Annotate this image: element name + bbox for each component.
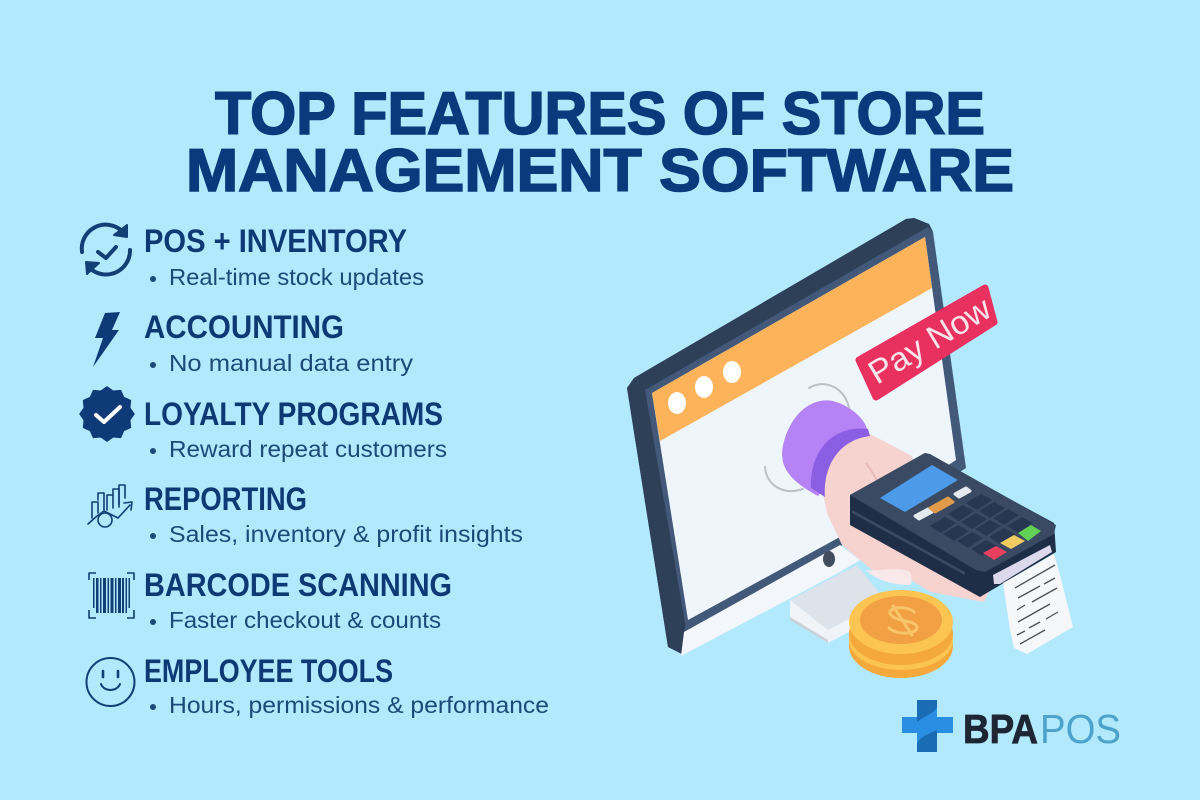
hand holding terminal [820, 433, 990, 602]
feature: POS + inventory [82, 223, 424, 290]
icon: sync with check [82, 225, 130, 275]
monitor body [627, 218, 966, 656]
terminal screen [880, 465, 958, 512]
icon: lightning bolt [93, 312, 120, 367]
heading: REPORTING [144, 481, 307, 517]
logo: BPA POS [902, 700, 1121, 752]
title: TOP FEATURES OF STORE [215, 80, 985, 147]
icon: verified badge [80, 387, 134, 441]
feature: barcode scanning [89, 567, 452, 633]
heading: EMPLOYEE TOOLS [144, 653, 393, 689]
heading: POS + INVENTORY [144, 223, 407, 259]
feature: accounting [93, 309, 414, 376]
sleeve cuff [782, 400, 870, 497]
motion arcs [765, 384, 849, 491]
illustration: POS payment on monitor [627, 218, 1073, 678]
heading: ACCOUNTING [144, 309, 344, 345]
icon: barcode [89, 573, 134, 618]
bullet text: Reward repeat customers [169, 436, 447, 462]
coin stack [849, 590, 953, 678]
receipt [993, 545, 1073, 654]
terminal top buttons [915, 488, 970, 519]
logo wordmark: BPA [963, 706, 1038, 752]
logo cross mark [902, 700, 953, 752]
bullet text: Hours, permissions & performance [169, 692, 549, 718]
monitor stand [790, 565, 890, 643]
feature: loyalty programs [80, 387, 447, 462]
title [186, 80, 1014, 204]
bullet text: Faster checkout & counts [169, 607, 441, 633]
feature: reporting [88, 481, 523, 547]
terminal keypad [930, 494, 1033, 556]
card terminal [850, 453, 1056, 597]
heading: LOYALTY PROGRAMS [144, 396, 443, 432]
button: Pay Now: Pay Now [862, 289, 997, 391]
heading: BARCODE SCANNING [144, 567, 452, 603]
terminal colour keys [983, 525, 1041, 560]
bullet text: Sales, inventory & profit insights [169, 521, 523, 547]
icon: chart with coin [88, 485, 132, 527]
bullet text: Real-time stock updates [169, 264, 424, 290]
title: MANAGEMENT SOFTWARE [186, 137, 1014, 204]
bullet text: No manual data entry [169, 350, 414, 376]
logo: BPA POS: POS [1040, 706, 1121, 752]
feature: employee tools [86, 653, 549, 718]
icon: smiley [86, 658, 134, 706]
